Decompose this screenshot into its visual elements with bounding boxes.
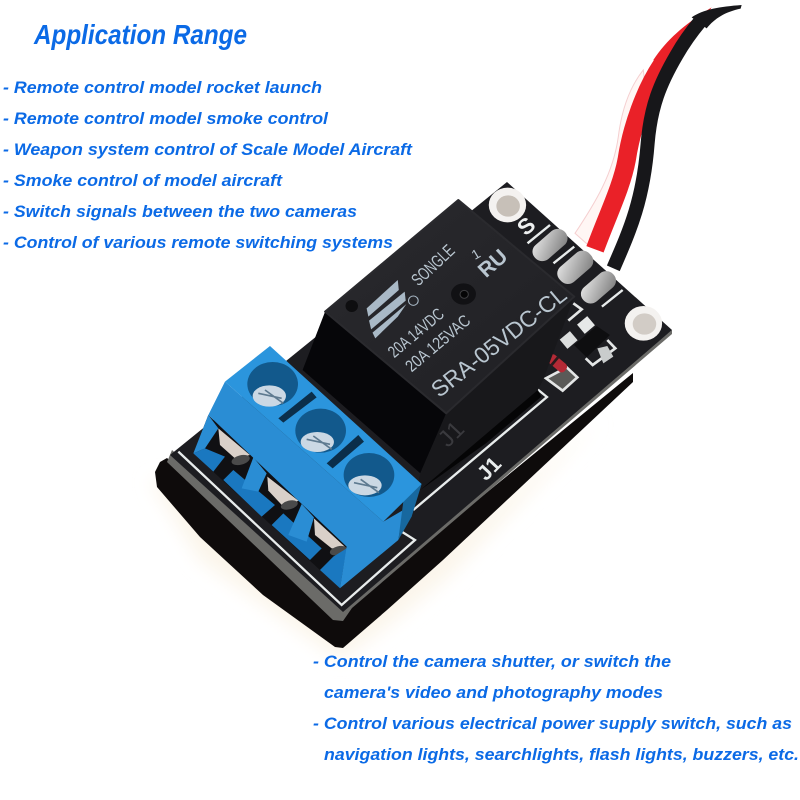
white wire — [575, 70, 647, 247]
silkscreen outline — [178, 388, 547, 605]
mounting hole 2 — [625, 306, 662, 341]
terminal end face — [398, 484, 422, 540]
item 4: - Smoke control of model aircraft — [3, 172, 284, 190]
title: Application Range — [33, 19, 247, 50]
relay slot — [420, 390, 541, 490]
clamp screw 3 — [329, 544, 348, 557]
terminal foot 1 — [193, 448, 225, 472]
terminal divider 2 — [327, 435, 364, 468]
clamp screw 1 — [230, 453, 251, 467]
footprint upper — [568, 303, 582, 321]
footprint lower — [586, 340, 615, 365]
relay J1 embossed: J1 — [433, 416, 470, 452]
mounting hole 1 — [489, 188, 526, 222]
item 8 line 2: navigation lights, searchlights, flash lights, buzzers, etc. — [324, 746, 799, 764]
relay marker 1: 1 — [469, 246, 483, 263]
red wire top — [653, 7, 712, 72]
relay body — [303, 200, 574, 508]
item 3: - Weapon system control of Scale Model Aircraft — [3, 141, 414, 159]
relay front side — [303, 312, 446, 473]
pin silk bars — [528, 225, 623, 307]
red wire — [595, 65, 662, 249]
solder pads — [529, 225, 620, 307]
screw 3 — [344, 453, 394, 497]
terminal leg 2 — [242, 457, 267, 492]
terminal foot 4 — [320, 548, 347, 588]
terminal front face — [208, 382, 403, 588]
application list: right — [313, 653, 799, 764]
nickel clamp 3 — [314, 518, 347, 548]
relay logo — [367, 280, 406, 338]
diode — [546, 353, 569, 374]
item 6: - Control of various remote switching systems — [3, 234, 393, 252]
terminal top face — [225, 346, 422, 522]
black wire — [613, 22, 700, 268]
pcb board — [170, 182, 672, 612]
pad and board base — [150, 182, 672, 660]
foam pad — [155, 373, 633, 648]
terminal foot 3 — [272, 513, 322, 560]
screw terminal — [193, 346, 422, 588]
nickel clamp 1 — [218, 428, 250, 458]
pad left — [560, 331, 578, 349]
item 7 line 2: camera's video and photography modes — [324, 684, 663, 702]
relay brand: SONGLE — [407, 241, 459, 289]
wires — [575, 5, 742, 268]
relay centre hole — [451, 283, 476, 305]
item 5: - Switch signals between the two cameras — [3, 203, 357, 221]
smd parts — [546, 303, 615, 391]
relay rating 2: 20A 125VAC — [402, 311, 474, 376]
relay registered mark — [408, 296, 418, 305]
item 1: - Remote control model rocket launch — [3, 79, 322, 97]
relay module — [150, 182, 672, 660]
relay UL mark: RU — [474, 245, 512, 282]
silk label J1: J1 — [473, 453, 506, 485]
relay rating 1: 20A 14VDC — [384, 305, 448, 361]
relay top — [325, 200, 574, 413]
foam glow — [150, 420, 600, 660]
nickel clamp 2 — [267, 477, 298, 508]
terminal base shadow — [193, 415, 347, 588]
pad top — [577, 316, 595, 334]
terminal leg 3 — [288, 504, 314, 542]
terminal divider 1 — [278, 392, 317, 423]
diode footprint — [546, 367, 577, 391]
screw 1 — [247, 362, 298, 407]
relay model: SRA-05VDC-CL — [426, 282, 572, 402]
clamp screw 2 — [280, 499, 299, 511]
transistor — [574, 326, 610, 357]
terminal leg 1 — [193, 415, 218, 453]
black wire tail — [692, 5, 742, 28]
item 2: - Remote control model smoke control — [3, 110, 328, 128]
screw 2 — [295, 409, 346, 453]
pcb edge — [167, 330, 672, 621]
relay right side — [413, 297, 574, 508]
pad right — [597, 346, 613, 363]
board top details — [303, 188, 662, 508]
item 7 line 1: - Control the camera shutter, or switch the — [313, 653, 671, 671]
item 8 line 1: - Control various electrical power supply switch, such as — [313, 715, 792, 733]
application list: left — [3, 79, 414, 252]
relay small hole — [346, 300, 358, 312]
terminal foot 2 — [223, 470, 275, 517]
silk label S: S — [512, 212, 541, 240]
